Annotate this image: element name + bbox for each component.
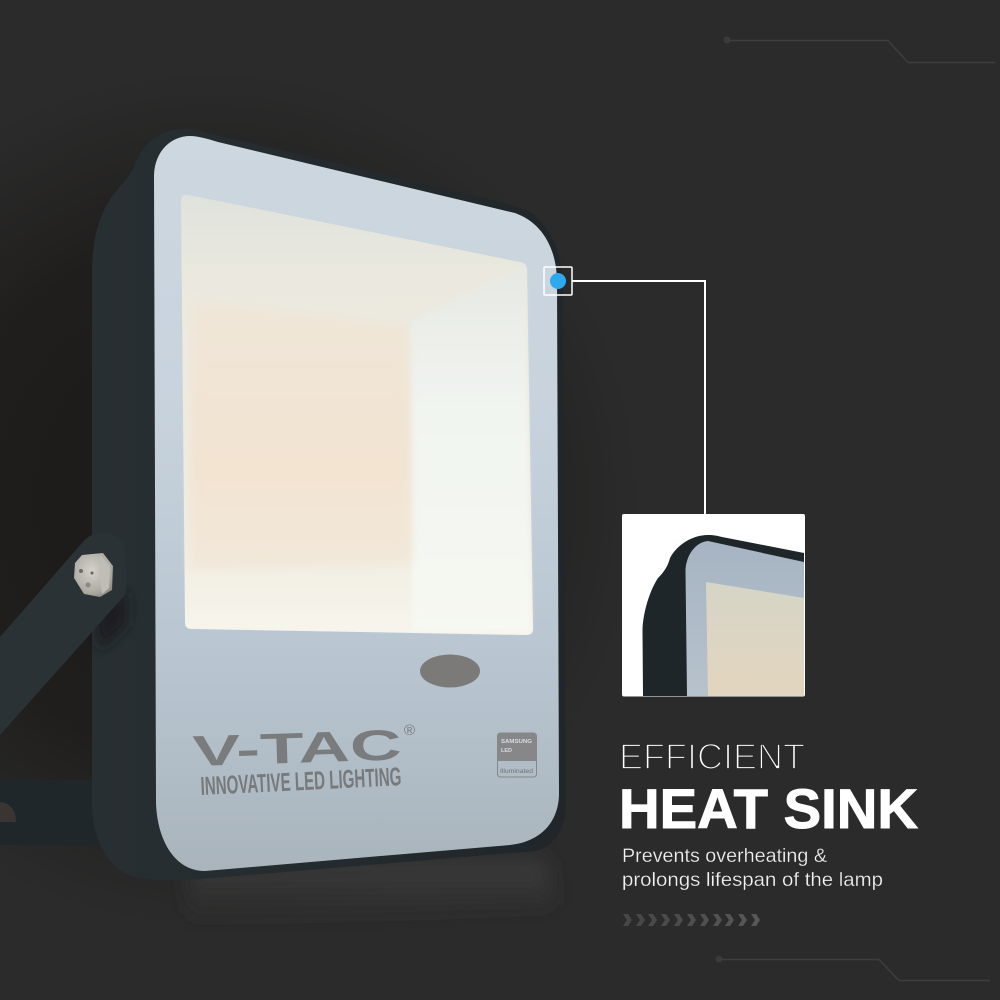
floor reflection: [185, 860, 555, 925]
inset lamp face: [686, 541, 804, 696]
LED lit area: [181, 195, 533, 635]
bracket bolt: [74, 553, 113, 597]
decorative circuit line top: [724, 36, 995, 62]
decorative circuit line bottom: [716, 956, 990, 980]
inset white card: [622, 514, 805, 696]
callout marker: [544, 267, 572, 295]
Samsung LED badge: Illuminated: [500, 769, 533, 775]
chevron row: [623, 914, 760, 926]
heading: [619, 736, 918, 840]
inset lamp housing: [642, 535, 804, 696]
brand tagline: INNOVATIVE LED LIGHTING: [200, 761, 402, 801]
inset lit area: [706, 582, 804, 696]
lamp housing: [92, 129, 566, 880]
Samsung LED badge: [497, 733, 536, 777]
description: [622, 845, 883, 891]
detail inset: [622, 514, 805, 696]
motion sensor: [420, 654, 480, 688]
description: Prevents overheating &: [622, 845, 827, 867]
brand logo V-TAC: [192, 721, 415, 776]
brand logo V-TAC: ®: [404, 722, 415, 739]
bracket lower foot: [0, 780, 112, 845]
Samsung LED badge: SAMSUNG: [501, 739, 532, 745]
heading bold line: HEAT SINK: [619, 777, 918, 840]
Samsung LED badge: LED: [501, 748, 512, 754]
lamp face panel: [154, 136, 559, 871]
floodlight lamp: [92, 129, 566, 880]
brand logo V-TAC: V-TAC: [192, 721, 402, 776]
callout connector line: [572, 281, 705, 514]
bracket arm: [0, 532, 127, 735]
heading light line: EFFICIENT: [619, 736, 805, 777]
description: prolongs lifespan of the lamp: [622, 869, 883, 891]
